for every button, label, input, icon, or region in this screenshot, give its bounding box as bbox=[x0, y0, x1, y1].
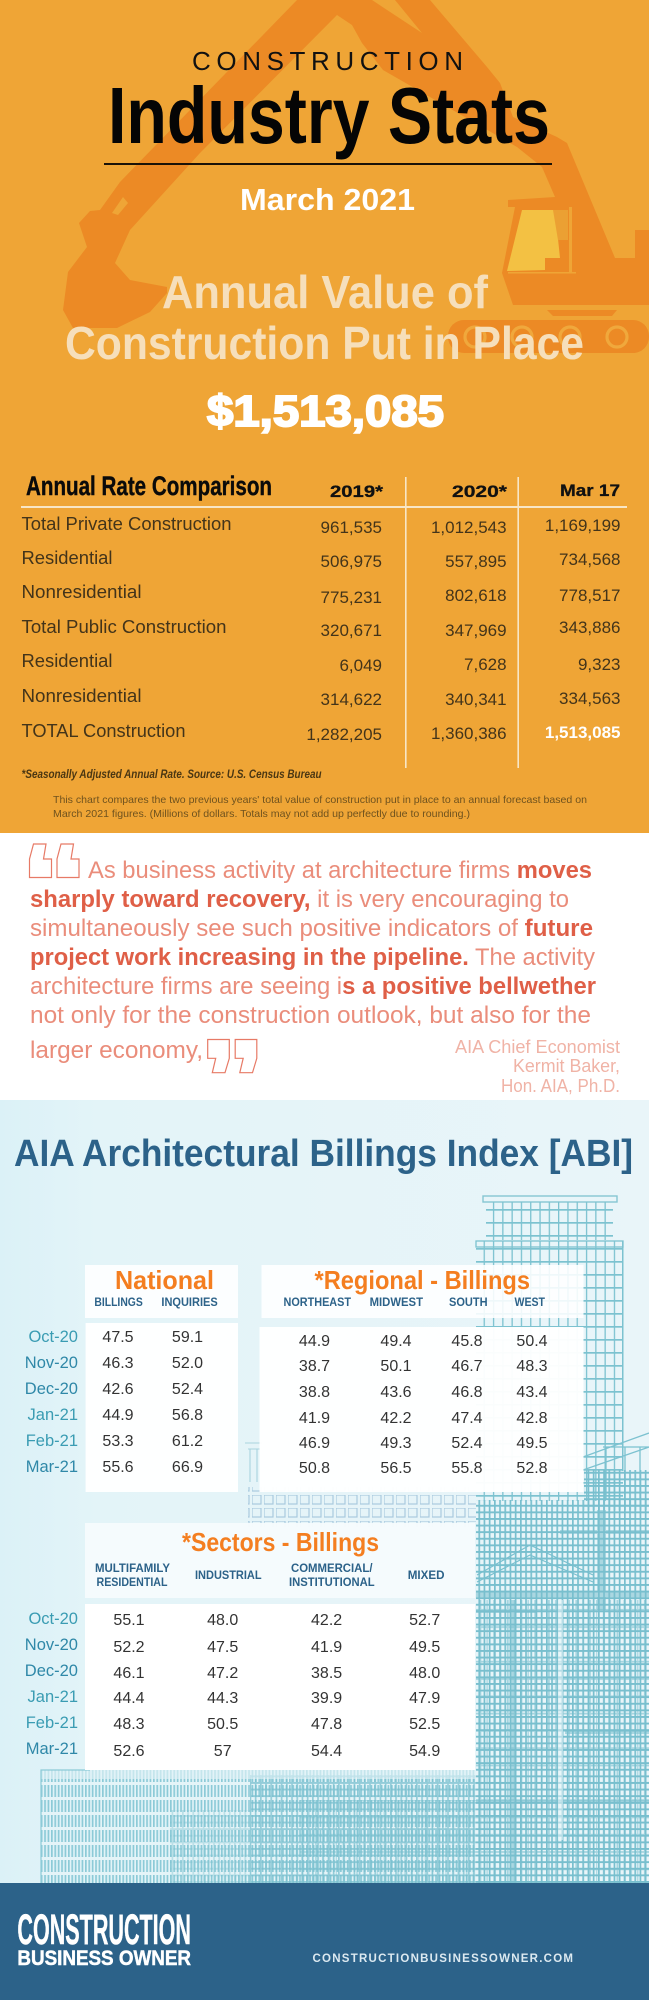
column mar 17 values: 734,568 bbox=[559, 550, 620, 569]
icon: excavator silhouette bbox=[63, 0, 649, 353]
values: 38.8 bbox=[299, 1384, 330, 1401]
values: 61.2 bbox=[172, 1433, 203, 1450]
row labels: months top: Mar-21 bbox=[26, 1458, 78, 1476]
chart note: March 2021 figures. (Millions of dollars. Totals may not add up perfectly due to rounding.) bbox=[53, 808, 470, 820]
column headers: 2019* bbox=[330, 482, 383, 501]
column 2019 values: 775,231 bbox=[321, 588, 382, 607]
quote text: sharply toward recovery, it is very encouraging to bbox=[30, 886, 569, 913]
column 2020 values: 557,895 bbox=[445, 552, 507, 571]
values: 48.3 bbox=[113, 1716, 145, 1733]
values: 42.2 bbox=[380, 1410, 412, 1427]
quote text: not only for the construction outlook, but also for the bbox=[30, 1002, 591, 1029]
quote text bbox=[30, 857, 596, 1064]
values: 43.6 bbox=[380, 1384, 412, 1401]
title: industry stats: Industry Stats bbox=[108, 71, 550, 160]
subheads: INQUIRIES bbox=[161, 1295, 218, 1309]
icon: closing quote bbox=[208, 1040, 257, 1073]
attribution: Kermit Baker, bbox=[513, 1056, 620, 1076]
values: 46.9 bbox=[299, 1435, 330, 1452]
row labels: months bottom: Mar-21 bbox=[26, 1740, 78, 1758]
values: 49.3 bbox=[380, 1435, 412, 1452]
subheads: WEST bbox=[514, 1295, 546, 1309]
heading: national: National bbox=[115, 1265, 214, 1295]
quote text: project work increasing in the pipeline. The activity bbox=[30, 944, 595, 971]
subheads: MIXED bbox=[408, 1568, 445, 1582]
row labels: TOTAL Construction bbox=[22, 720, 186, 741]
column mar 17 values: 343,886 bbox=[559, 618, 620, 637]
values bbox=[102, 1329, 203, 1476]
values: 55.1 bbox=[113, 1612, 145, 1629]
column 2020 values: 340,341 bbox=[445, 690, 507, 709]
values: 52.4 bbox=[451, 1435, 483, 1452]
attribution: Hon. AIA, Ph.D. bbox=[501, 1076, 620, 1096]
subheads: MIDWEST bbox=[370, 1295, 424, 1309]
row labels: Nonresidential bbox=[22, 685, 142, 706]
values: 44.3 bbox=[207, 1690, 238, 1707]
values: 42.8 bbox=[516, 1410, 548, 1427]
subheads bbox=[284, 1295, 546, 1309]
big value: $1,513,085 bbox=[207, 387, 444, 436]
website url: CONSTRUCTIONBUSINESSOWNER.COM bbox=[312, 1953, 573, 1965]
values: 52.2 bbox=[113, 1639, 145, 1656]
values: 50.8 bbox=[299, 1460, 330, 1477]
values: 49.4 bbox=[380, 1333, 412, 1350]
quote text: larger economy, bbox=[30, 1037, 203, 1064]
values: 52.6 bbox=[113, 1743, 145, 1760]
column 2019 values: 1,282,205 bbox=[306, 725, 382, 744]
values: 47.4 bbox=[451, 1410, 483, 1427]
attribution bbox=[455, 1037, 620, 1096]
values: 44.9 bbox=[102, 1407, 134, 1424]
values: 55.8 bbox=[451, 1460, 483, 1477]
values: 46.8 bbox=[451, 1384, 483, 1401]
row labels: months top: Feb-21 bbox=[26, 1432, 78, 1450]
subheads: INSTITUTIONAL bbox=[289, 1575, 375, 1589]
subheads: COMMERCIAL/ bbox=[291, 1561, 373, 1575]
row labels: months bottom: Jan-21 bbox=[28, 1688, 78, 1706]
icon: opening quote bbox=[30, 844, 79, 878]
column 2020 values: 347,969 bbox=[445, 621, 507, 640]
column 2019 values: 320,671 bbox=[321, 621, 382, 640]
row labels: months top: Dec-20 bbox=[25, 1380, 78, 1398]
table: annual rate comparison bbox=[21, 471, 627, 768]
values: 56.5 bbox=[380, 1460, 412, 1477]
row labels: Residential bbox=[22, 650, 112, 671]
heading: annual value bbox=[65, 266, 584, 369]
values: 43.4 bbox=[516, 1384, 548, 1401]
column mar 17 values: 778,517 bbox=[559, 586, 620, 605]
values: 46.3 bbox=[102, 1355, 134, 1372]
panel: quote bbox=[30, 844, 620, 1096]
quote text: simultaneously see such positive indicators of future bbox=[30, 915, 593, 942]
values: 46.1 bbox=[113, 1665, 145, 1682]
subheads: MULTIFAMILY bbox=[95, 1561, 170, 1575]
subheads bbox=[94, 1295, 218, 1309]
row labels: months top: Jan-21 bbox=[28, 1406, 78, 1424]
column headers: Mar 17 bbox=[560, 481, 620, 500]
subheads: BILLINGS bbox=[94, 1295, 143, 1309]
values: 54.4 bbox=[311, 1743, 342, 1760]
column 2019 values: 314,622 bbox=[321, 690, 382, 709]
values: 44.9 bbox=[299, 1333, 330, 1350]
subheads bbox=[95, 1561, 445, 1589]
values: 49.5 bbox=[516, 1435, 548, 1452]
column mar 17 values: 1,169,199 bbox=[545, 516, 620, 535]
values: 50.1 bbox=[380, 1358, 412, 1375]
values: 66.9 bbox=[172, 1459, 203, 1476]
values: 44.4 bbox=[113, 1690, 145, 1707]
values: 50.4 bbox=[516, 1333, 548, 1350]
values: 38.5 bbox=[311, 1665, 342, 1682]
subheads: INDUSTRIAL bbox=[195, 1568, 262, 1582]
row labels: months top bbox=[25, 1328, 78, 1476]
quote text: As business activity at architecture firms moves bbox=[88, 857, 592, 884]
values: 47.5 bbox=[102, 1329, 134, 1346]
values: 46.7 bbox=[451, 1358, 483, 1375]
subheads: SOUTH bbox=[449, 1295, 488, 1309]
values: 41.9 bbox=[311, 1639, 342, 1656]
values bbox=[299, 1333, 548, 1477]
subheads: RESIDENTIAL bbox=[96, 1575, 168, 1589]
values: 53.3 bbox=[102, 1433, 134, 1450]
chart note bbox=[53, 794, 587, 820]
values: 56.8 bbox=[172, 1407, 203, 1424]
values: 49.5 bbox=[409, 1639, 440, 1656]
heading: regional: *Regional - Billings bbox=[314, 1265, 530, 1295]
values: 47.5 bbox=[207, 1639, 238, 1656]
logo: construction business owner bbox=[17, 1906, 191, 1970]
values: 52.0 bbox=[172, 1355, 203, 1372]
column mar 17 values bbox=[545, 516, 620, 742]
illustration: buildings blueprint bbox=[41, 1196, 649, 1884]
values: 52.4 bbox=[172, 1381, 203, 1398]
panel: national bbox=[85, 1265, 238, 1492]
panel: blue abi background bbox=[0, 1100, 649, 1884]
column 2019 values bbox=[306, 518, 382, 744]
values bbox=[113, 1612, 440, 1760]
values: 54.9 bbox=[409, 1743, 440, 1760]
row labels: months bottom: Oct-20 bbox=[28, 1610, 78, 1628]
values: 47.9 bbox=[409, 1690, 440, 1707]
footnote: *Seasonally Adjusted Annual Rate. Source: U.S. Census Bureau bbox=[22, 767, 322, 781]
logo: construction business owner: CONSTRUCTION bbox=[17, 1906, 191, 1954]
row labels: months bottom: Feb-21 bbox=[26, 1714, 78, 1732]
panel: orange header background bbox=[0, 0, 649, 833]
values: 52.7 bbox=[409, 1612, 440, 1629]
values: 47.2 bbox=[207, 1665, 238, 1682]
column 2020 values: 7,628 bbox=[464, 655, 507, 674]
title rule bbox=[104, 163, 552, 165]
panel: sectors bbox=[85, 1523, 475, 1770]
row labels bbox=[22, 513, 232, 741]
heading: annual value: Construction Put in Place bbox=[65, 317, 584, 369]
values: 48.0 bbox=[409, 1665, 440, 1682]
values: 55.6 bbox=[102, 1459, 134, 1476]
attribution: AIA Chief Economist bbox=[455, 1037, 620, 1057]
values: 48.0 bbox=[207, 1612, 238, 1629]
values: 45.8 bbox=[451, 1333, 483, 1350]
panel: regional bbox=[260, 1265, 584, 1492]
row labels: Total Public Construction bbox=[22, 616, 226, 637]
row labels: Total Private Construction bbox=[22, 513, 232, 534]
column 2020 values bbox=[431, 518, 507, 743]
column mar 17 values: 334,563 bbox=[559, 689, 620, 708]
table heading: Annual Rate Comparison bbox=[26, 471, 272, 501]
column headers: 2020* bbox=[452, 482, 507, 501]
column mar 17 values: 9,323 bbox=[578, 655, 620, 674]
column 2020 values: 1,360,386 bbox=[431, 724, 507, 743]
column 2020 values: 802,618 bbox=[445, 586, 507, 605]
values: 48.3 bbox=[516, 1358, 548, 1375]
values: 50.5 bbox=[207, 1716, 238, 1733]
row labels: months bottom: Nov-20 bbox=[25, 1636, 78, 1654]
values: 41.9 bbox=[299, 1410, 330, 1427]
values: 59.1 bbox=[172, 1329, 203, 1346]
row labels: months bottom bbox=[25, 1610, 78, 1758]
values: 57 bbox=[214, 1743, 232, 1760]
values: 42.6 bbox=[102, 1381, 134, 1398]
column 2019 values: 961,535 bbox=[321, 518, 382, 537]
quote text: architecture firms are seeing is a positive bellwether bbox=[30, 973, 596, 1000]
date: March 2021 bbox=[240, 182, 415, 217]
chart note: This chart compares the two previous years' total value of construction put in place to an annual forecast based on bbox=[53, 794, 587, 806]
values: 52.8 bbox=[516, 1460, 548, 1477]
values: 52.5 bbox=[409, 1716, 440, 1733]
column 2019 values: 6,049 bbox=[339, 656, 382, 675]
row labels: Nonresidential bbox=[22, 581, 142, 602]
panel: footer bbox=[0, 1883, 649, 2000]
values: 38.7 bbox=[299, 1358, 330, 1375]
column headers bbox=[330, 481, 620, 501]
title: construction: CONSTRUCTION bbox=[192, 46, 463, 76]
values: 42.2 bbox=[311, 1612, 342, 1629]
column 2019 values: 506,975 bbox=[321, 552, 382, 571]
logo: construction business owner: BUSINESS OWNER bbox=[17, 1947, 191, 1970]
subheads: NORTHEAST bbox=[284, 1295, 352, 1309]
column 2020 values: 1,012,543 bbox=[431, 518, 507, 537]
row labels: months top: Oct-20 bbox=[28, 1328, 78, 1346]
row labels: months bottom: Dec-20 bbox=[25, 1662, 78, 1680]
values: 47.8 bbox=[311, 1716, 342, 1733]
heading: annual value: Annual Value of bbox=[162, 266, 489, 318]
column mar 17 values: 1,513,085 bbox=[545, 723, 620, 742]
heading: sectors: *Sectors - Billings bbox=[182, 1527, 379, 1557]
row labels: months top: Nov-20 bbox=[25, 1354, 78, 1372]
row labels: Residential bbox=[22, 547, 112, 568]
values: 39.9 bbox=[311, 1690, 342, 1707]
